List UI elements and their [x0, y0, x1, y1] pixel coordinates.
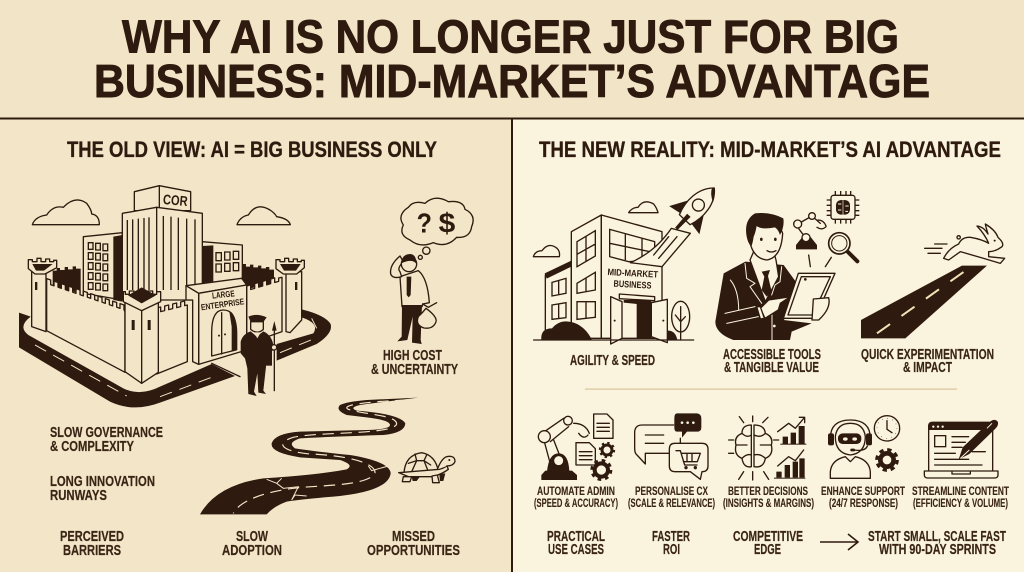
dark courtyard walls	[53, 266, 81, 293]
label: competitive edge	[733, 529, 803, 558]
label: perceived barriers: PERCEIVED	[60, 529, 124, 545]
illustration: castle enterprise	[19, 186, 473, 407]
label: slow adoption: ADOPTION	[222, 543, 282, 559]
icon: building	[545, 215, 667, 344]
label: automate admin: (SPEED & ACCURACY)	[534, 498, 618, 510]
label: accessible tools: ACCESSIBLE TOOLS	[723, 347, 821, 363]
label: perceived barriers	[60, 529, 124, 559]
icon: building: BUSINESS	[613, 279, 652, 291]
arrow	[820, 534, 858, 550]
icon: bushes and tree	[541, 301, 690, 340]
tower with COR sign	[122, 186, 202, 300]
illustration: rabbit on runway	[861, 224, 1005, 338]
label: faster roi: FASTER	[652, 529, 690, 545]
label: slow governance: & COMPLEXITY	[50, 439, 134, 455]
illustration: winding road with tortoise	[200, 398, 455, 514]
label: streamline content	[912, 486, 1009, 510]
label: enhance support	[821, 486, 905, 510]
icon: automate admin robot	[538, 414, 614, 480]
building right	[202, 242, 242, 283]
gatehouse: LARGE	[211, 288, 235, 301]
label: long innovation: LONG INNOVATION	[50, 474, 155, 490]
icon: personalise chat and cart	[635, 413, 708, 479]
panel: old view	[0, 119, 511, 572]
icon: streamline content laptop	[924, 420, 998, 478]
label: slow governance: SLOW GOVERNANCE	[50, 425, 163, 441]
label: practical use cases: USE CASES	[548, 542, 604, 558]
label: accessible tools: & TANGIBLE VALUE	[724, 360, 819, 376]
label: better decisions: BETTER DECISIONS	[728, 486, 808, 498]
icon: worried man with money bag	[391, 254, 437, 344]
heading: old view: THE OLD VIEW: AI = BIG BUSINESS ONLY	[67, 137, 437, 162]
panel: new reality	[513, 119, 1024, 572]
label: personalise cx	[628, 486, 715, 510]
winding road	[200, 398, 418, 514]
label: slow governance	[50, 425, 163, 455]
label: competitive edge: EDGE	[754, 542, 781, 558]
icon: guard with spear	[241, 315, 277, 396]
icon: magnifier	[829, 233, 857, 261]
road runway	[861, 266, 987, 338]
icon: tortoise	[399, 453, 455, 483]
label: perceived barriers: BARRIERS	[63, 543, 121, 559]
tower with COR sign: COR	[162, 191, 188, 209]
label: faster roi: ROI	[663, 542, 680, 558]
icon: rocket with exhaust	[630, 174, 729, 267]
label: high cost: & UNCERTAINTY	[371, 362, 458, 378]
icon: cloud left	[32, 200, 99, 225]
label: enhance support: ENHANCE SUPPORT	[821, 486, 905, 498]
label: accessible tools	[723, 347, 821, 376]
label: missed opportunities	[367, 529, 460, 559]
label: quick experimentation: & IMPACT	[903, 360, 952, 376]
label: practical use cases: PRACTICAL	[547, 529, 605, 545]
gatehouse: ENTERPRISE	[200, 296, 245, 312]
label: start small scale fast	[868, 529, 1006, 558]
label: missed opportunities: MISSED	[392, 529, 435, 545]
label: personalise cx: PERSONALISE CX	[635, 486, 708, 498]
road around castle	[19, 313, 235, 407]
label: slow adoption: SLOW	[236, 529, 268, 545]
icon: enhance support agent	[828, 416, 900, 478]
label: automate admin: AUTOMATE ADMIN	[537, 486, 615, 498]
castle wall left	[47, 279, 125, 372]
thought bubble with question mark and dollar: $	[439, 208, 456, 239]
thought bubble with question mark and dollar: ?	[417, 208, 432, 239]
label: long innovation: RUNWAYS	[50, 488, 107, 504]
icon: clouds	[533, 202, 658, 257]
tower corner	[123, 287, 161, 383]
label: agility and speed: AGILITY & SPEED	[570, 353, 655, 369]
label: high cost: HIGH COST	[383, 348, 442, 364]
icon: cloud right	[237, 207, 290, 225]
label: missed opportunities: OPPORTUNITIES	[367, 543, 460, 559]
label: better decisions	[723, 486, 814, 510]
label: faster roi	[652, 529, 690, 558]
title: BUSINESS: MID-MARKET’S ADVANTAGE	[94, 55, 930, 107]
illustration: businessman with tablet and AI tools	[715, 191, 859, 340]
illustration: mid-market building with rocket	[533, 174, 729, 344]
label: long innovation	[50, 474, 155, 504]
label: personalise cx: (SCALE & RELEVANCE)	[628, 498, 715, 510]
label: automate admin	[534, 486, 618, 510]
label: quick experimentation	[861, 347, 994, 376]
icon: building: MID-MARKET	[607, 267, 659, 280]
building left	[83, 233, 122, 300]
label: better decisions: (INSIGHTS & MARGINS)	[723, 498, 814, 510]
thought bubble with question mark and dollar	[401, 198, 473, 259]
label: competitive edge: COMPETITIVE	[733, 529, 803, 545]
icon: robot arm	[794, 213, 826, 249]
icon row: use cases	[538, 413, 998, 480]
icon: ai chip	[827, 191, 859, 224]
castle wall right	[157, 301, 187, 374]
gatehouse	[186, 278, 247, 364]
icon: man	[715, 213, 835, 340]
tower right	[276, 258, 304, 333]
label: high cost	[371, 348, 458, 378]
title: WHY AI IS NO LONGER JUST FOR BIG	[122, 10, 899, 62]
title	[94, 10, 930, 107]
icon: rabbit	[925, 224, 1005, 263]
label: enhance support: (24/7 RESPONSE)	[829, 498, 898, 510]
icon: better decisions brain and charts	[729, 416, 806, 480]
tower left	[28, 258, 57, 332]
label: slow adoption	[222, 529, 282, 559]
label: practical use cases	[547, 529, 605, 558]
